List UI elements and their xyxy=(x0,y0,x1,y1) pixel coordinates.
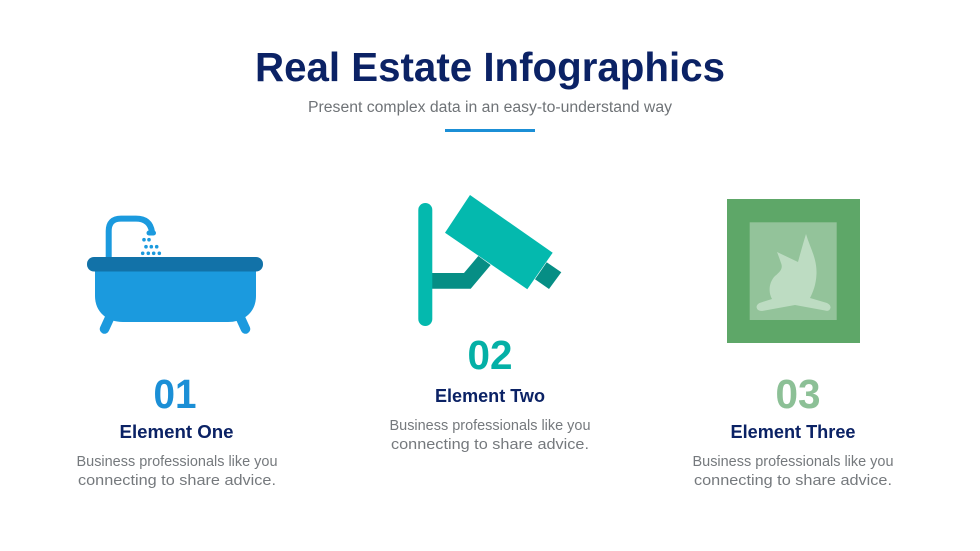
title: Real Estate Infographics xyxy=(255,44,725,90)
icon: campfire xyxy=(727,199,860,343)
header xyxy=(255,44,725,132)
text block: connecting to share advice. xyxy=(391,436,589,453)
text block: Business professionals like you xyxy=(390,417,590,434)
heading: element two: Element Two xyxy=(435,386,545,406)
text block xyxy=(76,453,278,489)
number 03: 03 xyxy=(776,371,820,417)
panel: element one xyxy=(76,219,278,489)
text block xyxy=(390,417,590,453)
text block: Business professionals like you xyxy=(76,453,278,470)
heading: element three: Element Three xyxy=(730,422,856,442)
title underline xyxy=(445,129,535,132)
heading: element one: Element One xyxy=(120,422,234,442)
subtitle: Present complex data in an easy-to-understand way xyxy=(308,99,672,116)
panel: element three xyxy=(692,199,894,489)
number 01: 01 xyxy=(154,371,196,417)
text block xyxy=(692,453,894,489)
number 02: 02 xyxy=(468,332,512,378)
text block: connecting to share advice. xyxy=(78,472,276,489)
icon: bathtub xyxy=(87,219,263,329)
panel: element two xyxy=(390,195,590,453)
text block: connecting to share advice. xyxy=(694,472,892,489)
text block: Business professionals like you xyxy=(692,453,894,470)
icon: security camera xyxy=(418,195,561,326)
